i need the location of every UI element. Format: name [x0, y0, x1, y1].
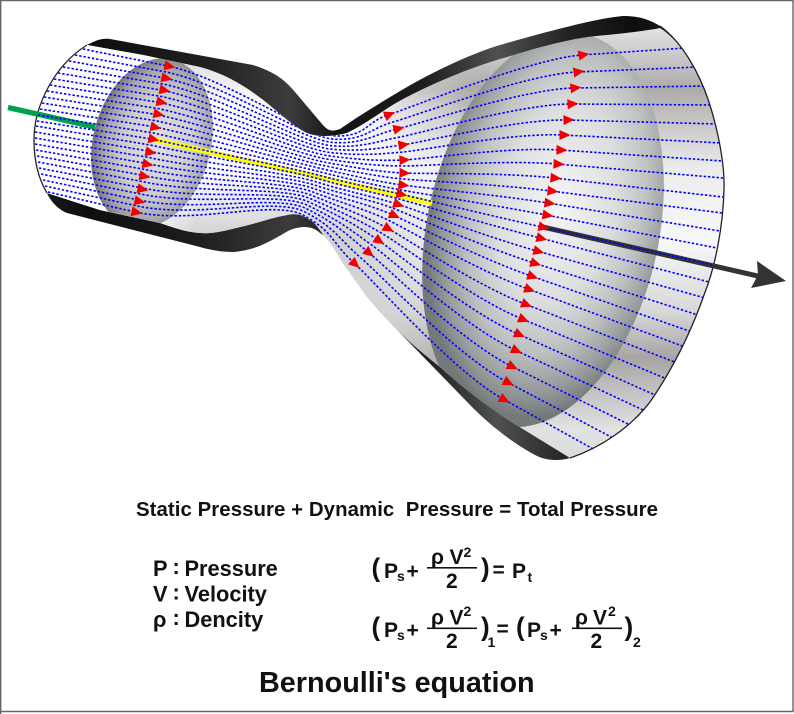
equation: Bernoulli between sections: + [406, 619, 419, 642]
equation: total pressure: = [492, 559, 505, 582]
equation: Bernoulli between sections: 2 [633, 634, 641, 650]
tube inner surface [34, 28, 724, 458]
equation: total pressure: + [406, 560, 419, 583]
equation: total pressure: s [397, 568, 405, 584]
cross-section disc 2 [422, 36, 664, 427]
cross-section disc 1 [91, 58, 213, 224]
legend of symbols: : [172, 554, 180, 579]
legend of symbols: Velocity [184, 582, 267, 606]
equation: Bernoulli between sections: 2 [590, 630, 602, 653]
legend of symbols: ρ [153, 607, 166, 632]
equation: Bernoulli between sections: 2 [446, 630, 458, 653]
equation: Bernoulli between sections: ( [372, 612, 380, 642]
equation: total pressure [372, 544, 532, 593]
equation: Bernoulli between sections: ρ [431, 606, 444, 630]
legend of symbols: Dencity [184, 607, 263, 632]
equation: total pressure: V [450, 546, 464, 569]
equation: Bernoulli between sections: = [496, 618, 509, 641]
equation: Bernoulli between sections: ) [624, 612, 633, 642]
red arrows at throat exit [348, 108, 411, 272]
equation: Bernoulli between sections: + [550, 619, 562, 642]
yellow centre line [152, 139, 432, 203]
pressure sum statement: Static Pressure + Dynamic Pressure = Total Pressure [136, 499, 658, 521]
equation: total pressure: 2 [464, 544, 472, 560]
equation: total pressure: t [528, 569, 532, 585]
rim outlines [34, 26, 724, 458]
venturi tube diagram [0, 0, 794, 480]
equation: total pressure: P [384, 560, 398, 583]
tube outer wall [34, 16, 724, 460]
equation: Bernoulli between sections: 2 [464, 603, 472, 619]
equation: Bernoulli between sections: V [450, 606, 464, 630]
red arrows at section 2 [498, 49, 590, 407]
equation: Bernoulli between sections: P [384, 619, 398, 642]
legend of symbols: : [172, 605, 180, 630]
equation: Bernoulli between sections: ( [516, 612, 525, 642]
equation: Bernoulli between sections: s [397, 627, 405, 643]
legend of symbols: P [153, 556, 168, 581]
red arrows at section 1 [131, 60, 176, 218]
equation: Bernoulli between sections: P [527, 619, 541, 642]
legend of symbols: V [153, 582, 168, 606]
equation: Bernoulli between sections: 2 [608, 603, 616, 619]
main caption: Bernoulli's equation [259, 667, 535, 699]
legend of symbols: Pressure [184, 556, 278, 581]
dark outlet arrow [543, 227, 786, 288]
green inlet line [8, 108, 95, 127]
equation: total pressure: ρ [431, 546, 444, 569]
equation: Bernoulli between sections: s [540, 627, 548, 643]
equation: total pressure: 2 [446, 570, 458, 593]
equation: Bernoulli between sections: ) [481, 612, 490, 642]
legend of symbols: : [172, 580, 180, 604]
equation: Bernoulli between sections: ρ [575, 606, 588, 630]
equation: total pressure: ) [481, 552, 490, 582]
equation: Bernoulli between sections [372, 603, 641, 653]
equation: Bernoulli between sections: 1 [488, 634, 496, 650]
legend of symbols [153, 554, 278, 632]
equation: Bernoulli between sections: V [593, 606, 607, 630]
equation: total pressure: ( [372, 552, 380, 582]
equation: total pressure: P [512, 560, 526, 583]
streamlines [35, 48, 723, 450]
